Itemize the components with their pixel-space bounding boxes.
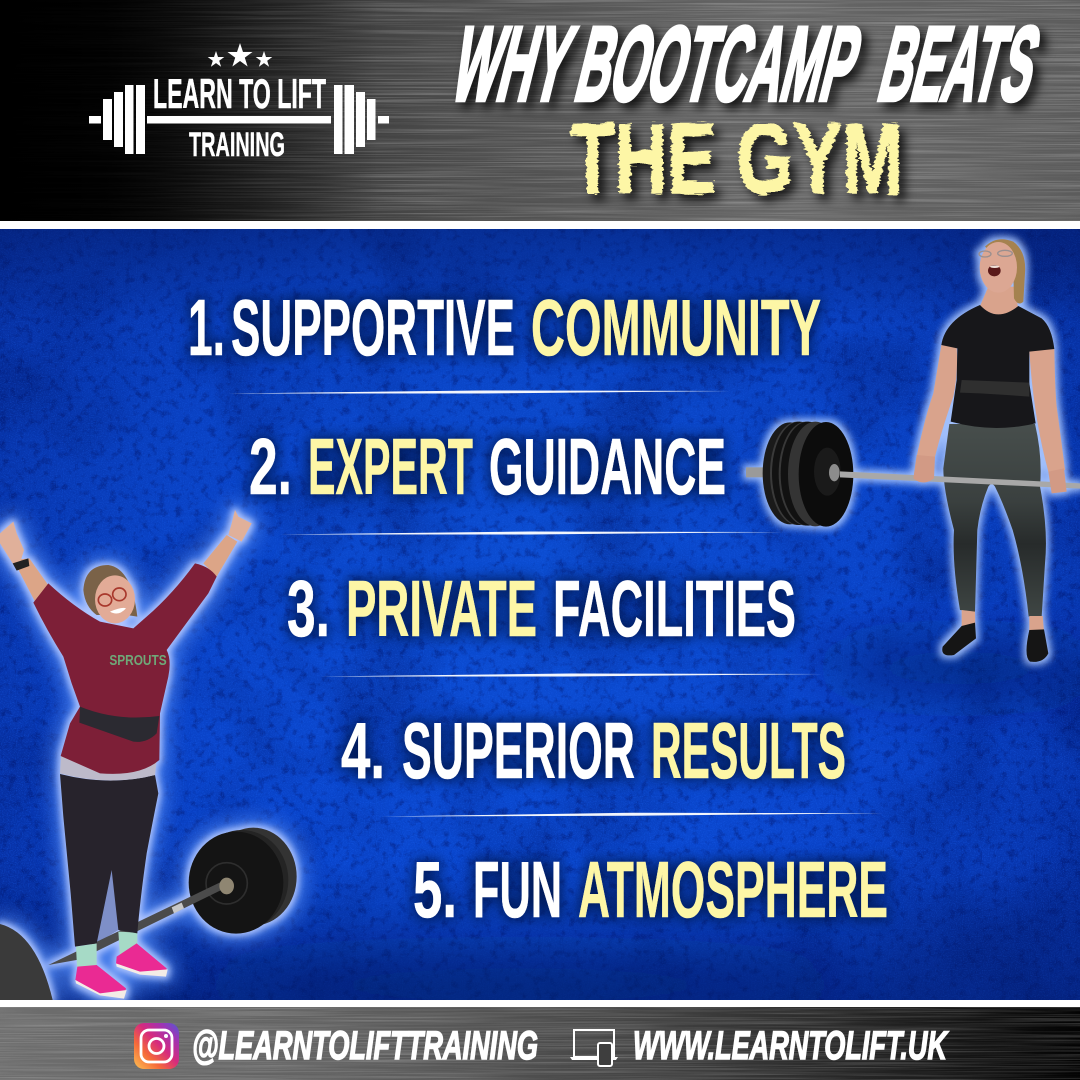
divider 1	[228, 390, 730, 394]
mouth	[988, 265, 1001, 276]
belt	[79, 707, 159, 742]
list item 4: Superior Results: 4.	[341, 706, 385, 795]
bar	[840, 471, 1080, 489]
wrist band	[13, 558, 29, 571]
hub	[219, 878, 234, 894]
sweater	[33, 563, 217, 774]
hands	[0, 510, 252, 563]
icon: laptop and phone	[570, 1030, 618, 1066]
socks	[76, 932, 137, 973]
footer panel: brushed metal	[0, 1000, 1080, 1080]
photo: woman cheering with barbell	[0, 510, 297, 1000]
hair	[83, 565, 137, 617]
list item 5: Fun Atmosphere: 5.	[413, 845, 457, 934]
gap between the legs	[97, 867, 118, 943]
ankles and socks	[942, 610, 1048, 662]
logo: Learn to Lift Training	[89, 43, 389, 164]
barbell plates	[746, 422, 853, 527]
logo: Learn to Lift Training: TRAINING	[189, 126, 285, 164]
legs	[943, 424, 1046, 617]
face	[95, 575, 135, 623]
list item 1: Supportive Community: 1.	[188, 283, 225, 372]
list item 4: Superior Results: RESULTS	[651, 706, 846, 795]
glasses	[98, 588, 126, 606]
divider 4	[380, 813, 883, 816]
list item 1: Supportive Community: COMMUNITY	[531, 283, 821, 372]
icon: instagram	[134, 1023, 179, 1069]
bar knurl band	[172, 903, 184, 913]
right plates	[189, 828, 297, 934]
teeth	[990, 265, 999, 268]
list item 5: Fun Atmosphere	[413, 845, 888, 934]
neck	[980, 287, 1018, 315]
sweater lettering: SPROUTS	[109, 653, 167, 669]
smile	[110, 608, 126, 614]
divider 3	[320, 674, 823, 676]
glasses	[979, 250, 1012, 257]
list item 3: Private Facilities: FACILITIES	[553, 564, 796, 653]
list item 3: Private Facilities: 3.	[287, 564, 330, 653]
hair	[985, 239, 1025, 304]
shoes	[75, 943, 168, 999]
face	[980, 242, 1017, 293]
list item 2: Expert Guidance	[249, 422, 726, 511]
shirt	[941, 305, 1054, 428]
instagram handle: @LEARNTOLIFTTRAINING	[192, 1024, 538, 1068]
raised arms	[13, 535, 237, 602]
title: Why Bootcamp Beats: WHY	[442, 4, 585, 123]
bar	[48, 882, 227, 965]
list item 2: Expert Guidance: GUIDANCE	[489, 422, 726, 511]
title: The Gym: THE GYM	[570, 103, 903, 215]
list item 2: Expert Guidance: EXPERT	[308, 422, 473, 511]
blue panel background	[0, 221, 1080, 1008]
header panel: brushed metal	[0, 0, 1080, 221]
leggings	[60, 774, 158, 947]
arms	[917, 345, 1065, 472]
undershirt	[60, 755, 157, 780]
list item 5: Fun Atmosphere: FUN	[473, 845, 562, 934]
left plate	[0, 924, 53, 1000]
divider 2	[280, 532, 783, 534]
logo: Learn to Lift Training: LEARN TO LIFT	[153, 70, 326, 117]
list item 1: Supportive Community: SUPPORTIVE	[231, 283, 515, 372]
belt	[960, 380, 1029, 397]
list item 4: Superior Results: SUPERIOR	[402, 706, 635, 795]
photo: woman deadlifting with barbell	[746, 239, 1080, 662]
list item 3: Private Facilities: PRIVATE	[346, 564, 537, 653]
hands	[913, 455, 1067, 493]
list item 2: Expert Guidance: 2.	[249, 422, 292, 511]
list item 3: Private Facilities	[287, 564, 796, 653]
